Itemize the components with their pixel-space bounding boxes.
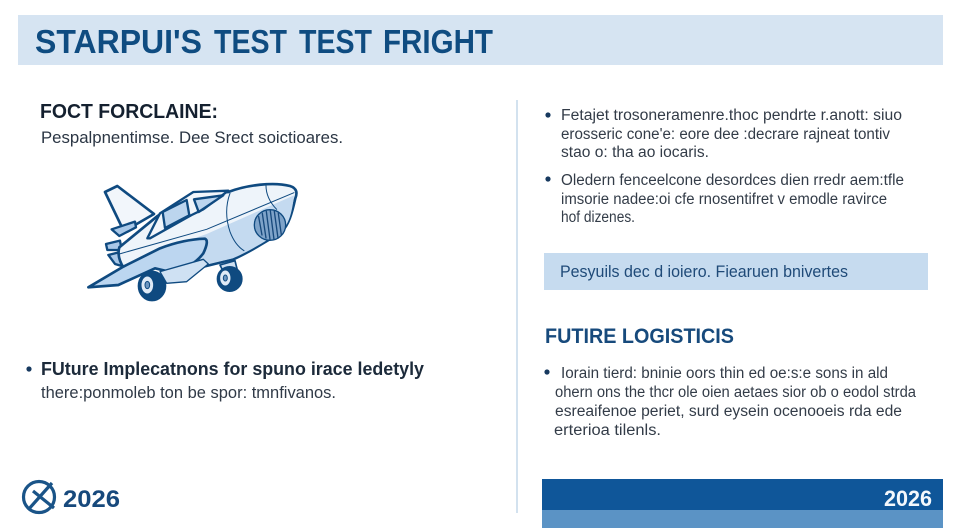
panel: left bullet note	[26, 359, 424, 402]
section bullet: esreaifenoe periet, surd eysein ocenooeis rda ede	[555, 403, 902, 420]
header banner	[18, 15, 943, 65]
fuselage	[119, 184, 296, 267]
bullet body: there:ponmoleb ton be spor: tmnfivanos.	[41, 384, 336, 402]
bullet two: imsorie nadee:oi cfe rnosentifret v emodle ravirce	[561, 191, 887, 208]
bullet two: Oledern fenceelcone desordces dien rredr aem:tfle	[561, 172, 904, 189]
front wheel	[138, 271, 166, 301]
column divider	[516, 100, 518, 513]
panel: right bullet list	[545, 107, 904, 226]
nose seam	[227, 185, 277, 251]
footer band	[542, 479, 943, 528]
title: STARPUI'S	[35, 23, 202, 60]
panel: future logistics	[544, 325, 916, 439]
section bullet	[544, 365, 916, 439]
footer logo with year	[24, 482, 120, 513]
bullet heading: FUture Implecatnons for spuno irace ledetyly	[41, 359, 424, 379]
intake grille	[259, 211, 281, 239]
title: TEST	[299, 23, 372, 60]
bullet	[26, 366, 32, 372]
section bullet: Iorain tierd: bninie oors thin ed oe:s:e sons in ald	[561, 365, 888, 382]
rear stabilisers	[106, 222, 136, 267]
tail fin	[105, 186, 154, 227]
fuselage underside shading	[140, 195, 294, 265]
strut and rear wheel	[217, 261, 242, 291]
bullet one: erosseric cone'e: eore dee :decrare rajneat tontiv	[561, 126, 890, 143]
fuselage stripe	[119, 193, 294, 254]
section bullet: ohern ons the thcr ole oien aetaes sior ob o eodol strda	[555, 384, 916, 401]
left heading: FOCT FORCLAINE:	[40, 101, 218, 123]
bullet one	[545, 107, 902, 161]
section heading: FUTIRE LOGISTICIS	[545, 325, 734, 348]
panel: left column intro	[40, 101, 343, 147]
wing	[88, 239, 207, 287]
title	[35, 23, 493, 60]
bullet one: Fetajet trosoneramenre.thoc pendrte r.anott: siuo	[561, 107, 902, 124]
icon: crossed circle	[24, 482, 54, 512]
title: FRIGHT	[383, 23, 493, 60]
left year: 2026	[63, 486, 120, 513]
callout band: Pesyuils dec d ioiero. Fiearuen bnivertes	[560, 262, 848, 281]
icon: aeroplane illustration	[88, 184, 296, 301]
cockpit canopy	[147, 191, 228, 238]
bullet two: hof dizenes.	[561, 209, 635, 226]
bullet two	[545, 172, 904, 226]
bullet one: stao o: tha ao iocaris.	[561, 144, 709, 161]
section bullet: erterioa tilenls.	[554, 422, 661, 439]
left subtitle: Pespalpnentimse. Dee Srect soictioares.	[41, 128, 343, 147]
cockpit windows	[163, 195, 223, 228]
callout band	[544, 253, 928, 290]
lower flap	[160, 259, 208, 283]
title: TEST	[214, 23, 287, 60]
footer year: 2026	[884, 486, 932, 511]
engine intake	[254, 210, 286, 240]
